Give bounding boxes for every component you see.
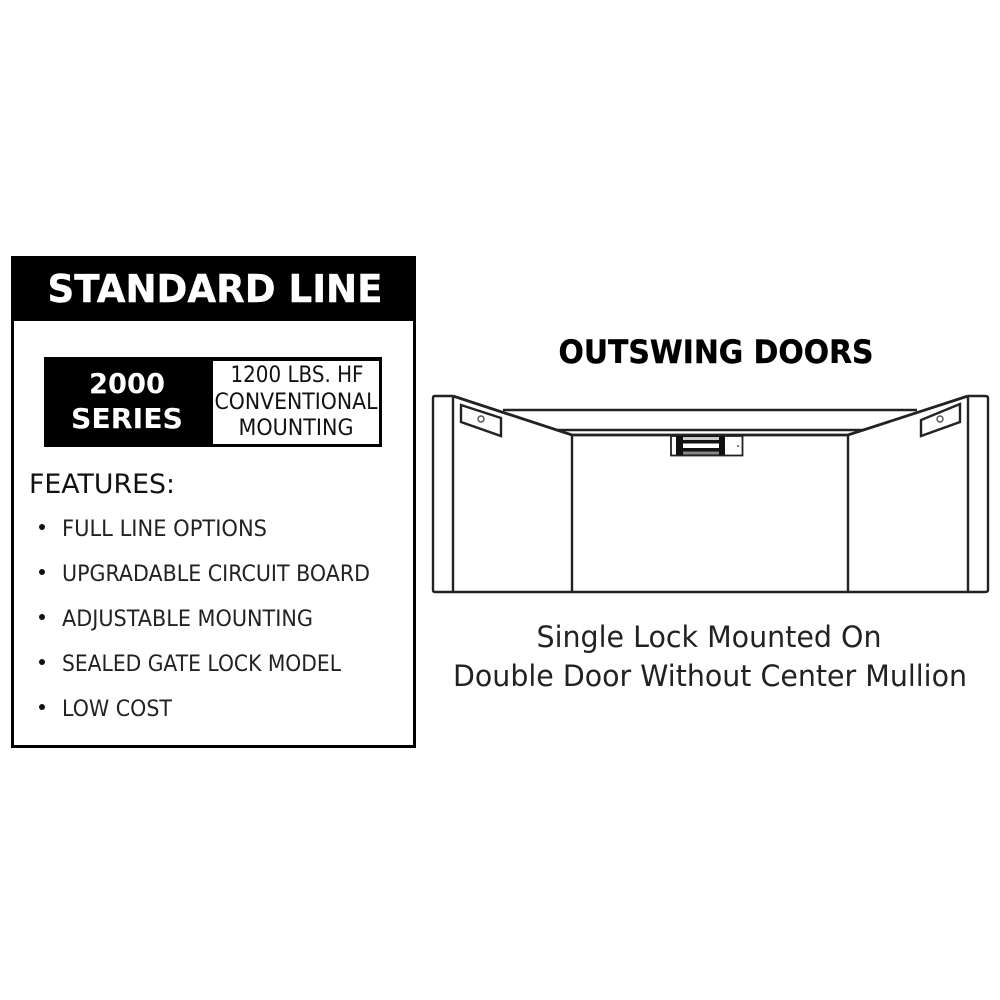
caption: [453, 620, 967, 693]
features list: SEALED GATE LOCK MODEL: [62, 652, 342, 677]
features list: [39, 517, 370, 722]
right bracket: [921, 404, 960, 436]
series description: CONVENTIONAL: [214, 390, 378, 415]
series description: 1200 LBS. HF: [230, 363, 364, 388]
features list: ADJUSTABLE MOUNTING: [62, 607, 313, 632]
left bracket: [461, 405, 501, 436]
series description: MOUNTING: [238, 416, 354, 441]
series name: [71, 367, 183, 435]
features list: FULL LINE OPTIONS: [62, 517, 267, 542]
caption: Single Lock Mounted On: [536, 620, 882, 654]
series name: SERIES: [71, 402, 183, 435]
series badge: [44, 357, 382, 447]
features list: UPGRADABLE CIRCUIT BOARD: [62, 562, 370, 587]
caption: Double Door Without Center Mullion: [453, 659, 967, 693]
header: standard line: [11, 256, 416, 321]
magnetic lock: [671, 436, 742, 456]
door diagram: [433, 396, 988, 592]
panel: standard line: [11, 256, 416, 746]
series name: 2000: [89, 367, 165, 400]
features list: LOW COST: [62, 697, 173, 722]
heading: outswing doors: OUTSWING DOORS: [558, 333, 874, 371]
door frame: [433, 396, 988, 592]
header: standard line: STANDARD LINE: [48, 267, 382, 311]
features heading: FEATURES:: [29, 469, 175, 500]
series description: [214, 363, 378, 441]
